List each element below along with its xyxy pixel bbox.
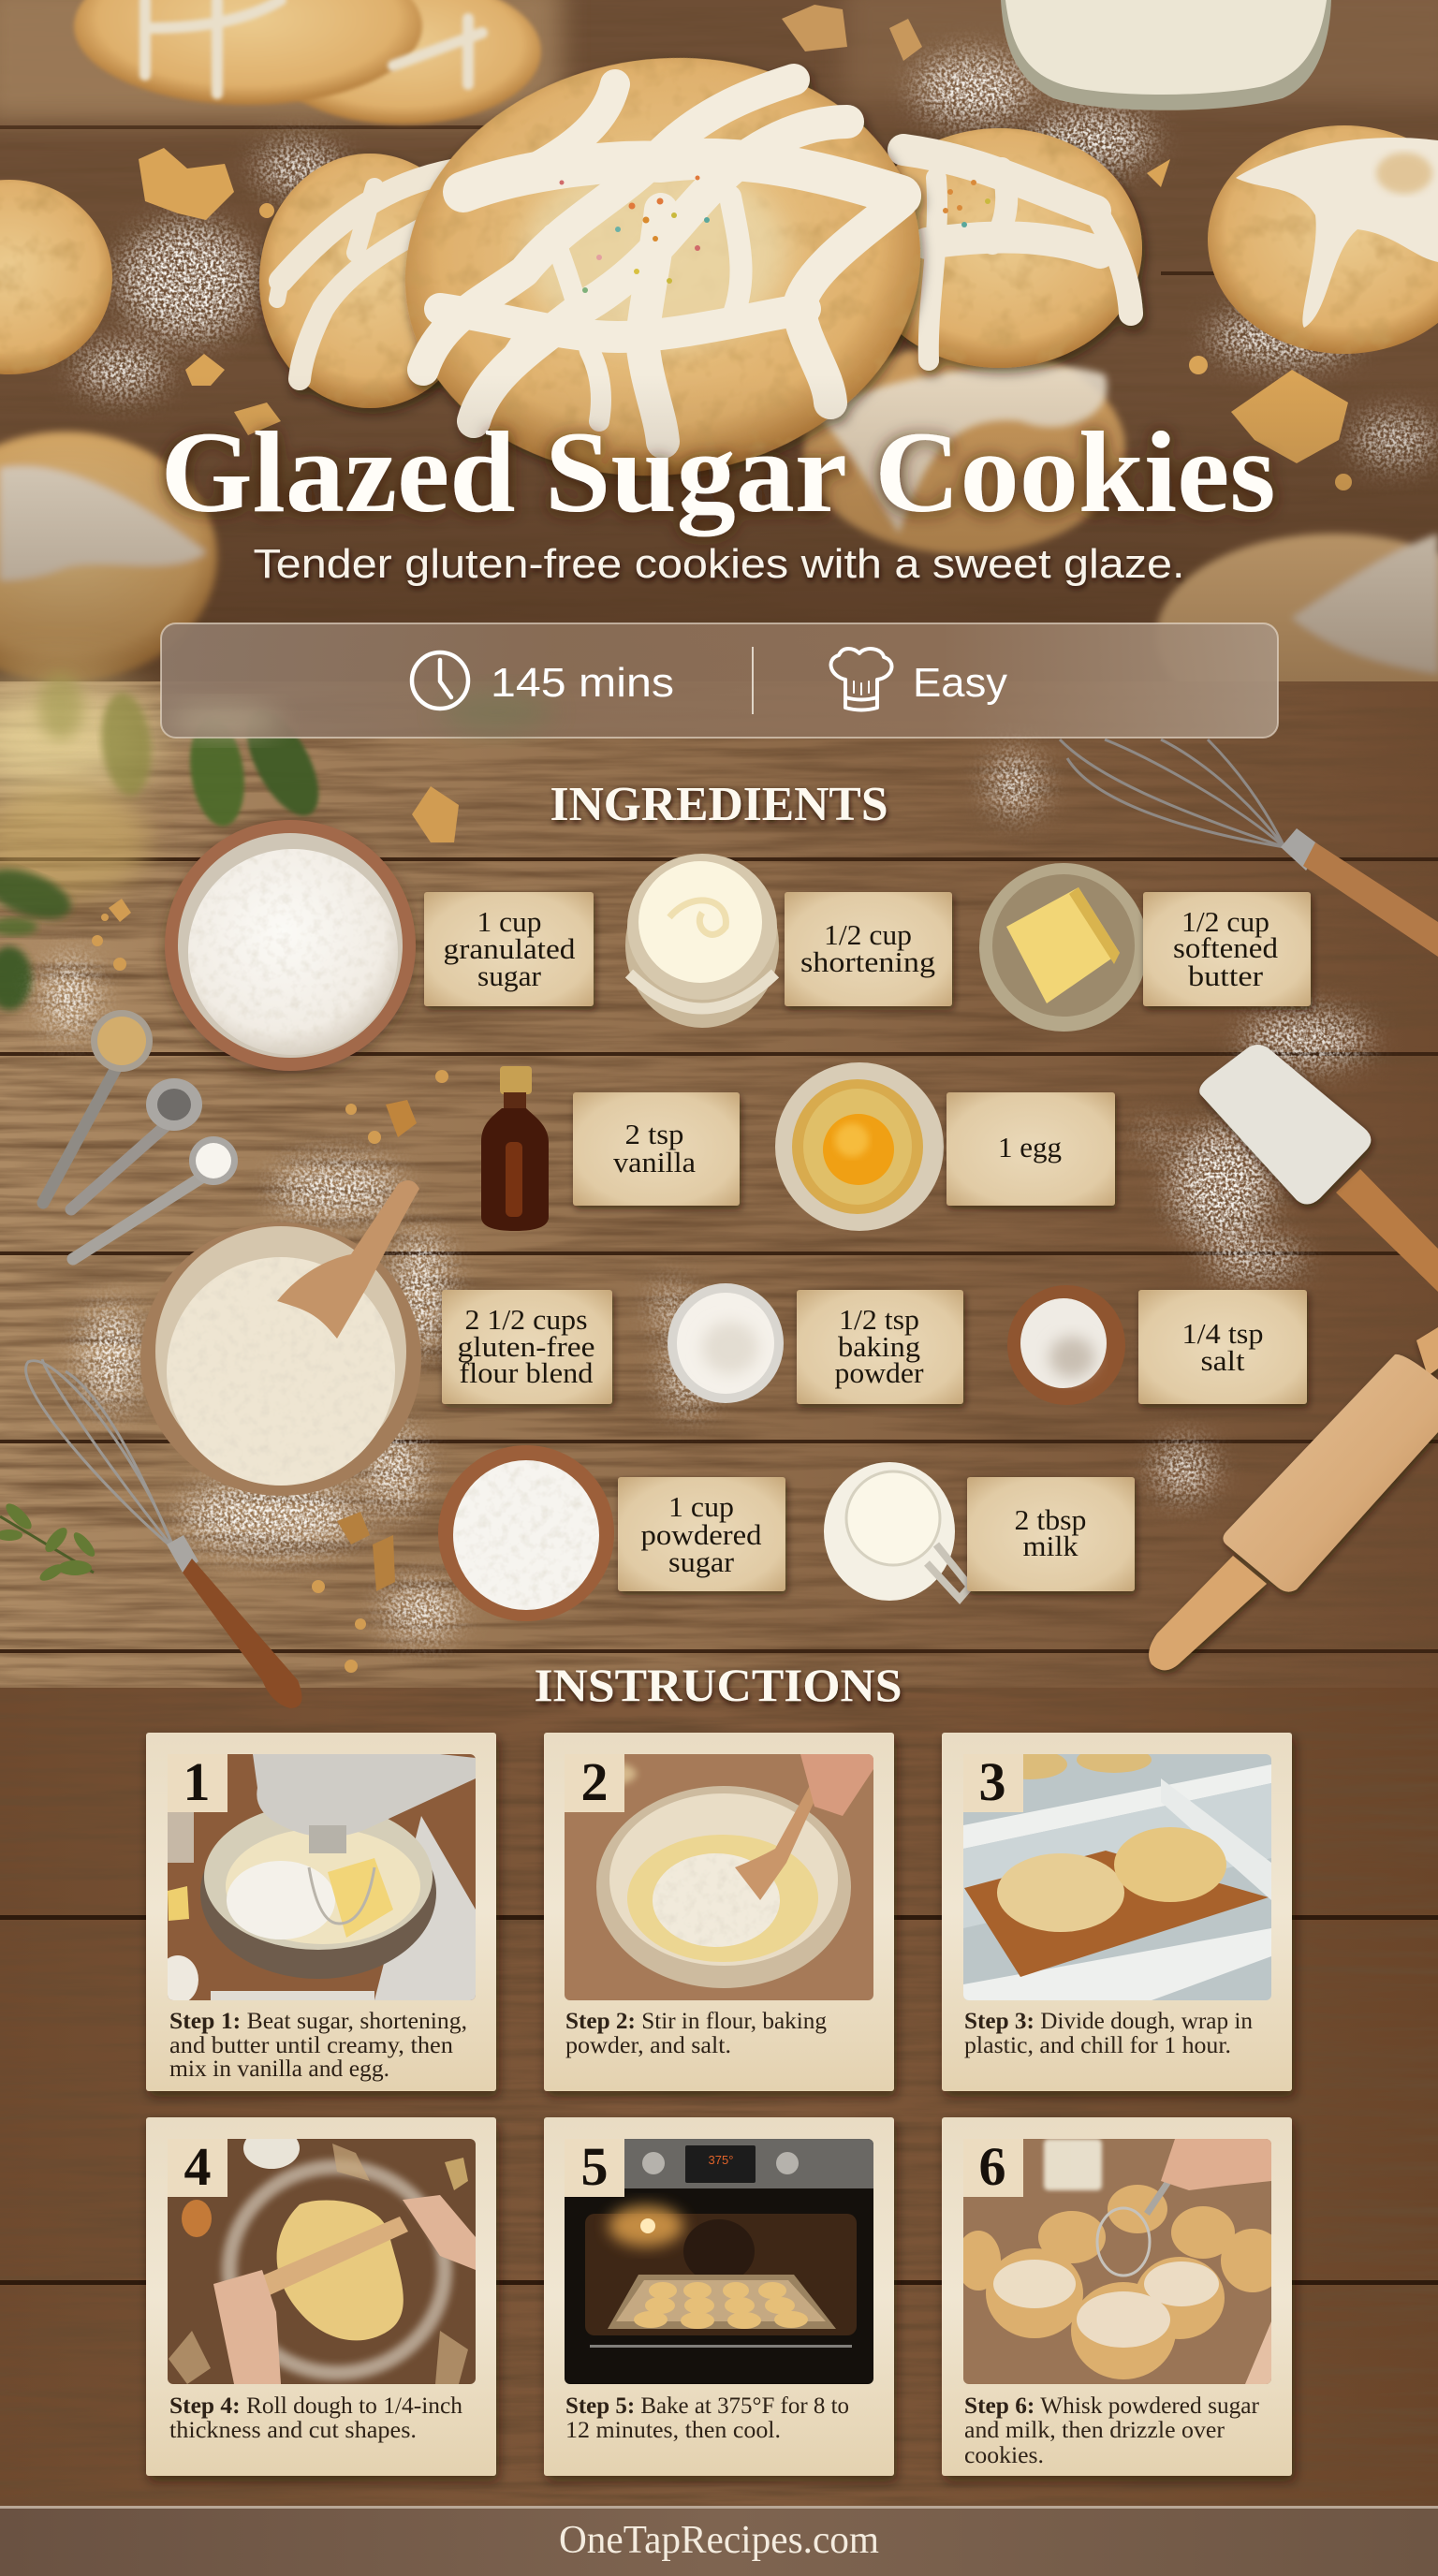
card: baking powder: baking <box>838 1330 920 1363</box>
photo: dough in fridge <box>963 1747 1271 2000</box>
ingredient: milk jug <box>824 1462 970 1601</box>
step badge: 6 <box>979 2136 1005 2197</box>
ingredient: egg bowl <box>775 1062 944 1231</box>
step card 1 <box>146 1733 496 2091</box>
hero lower fade <box>0 374 1438 683</box>
ingredient: powdered sugar bowl <box>438 1445 614 1621</box>
step text: powder, and salt. <box>565 2033 731 2058</box>
step badge: 2 <box>580 1751 609 1812</box>
icon: herb sprig <box>0 1500 98 1584</box>
card: baking powder: powder <box>835 1356 924 1389</box>
card: milk <box>967 1477 1135 1591</box>
crumbs <box>139 5 1352 490</box>
card: milk: milk <box>1022 1530 1078 1562</box>
icon: spatula <box>1199 1045 1438 1292</box>
card: powdered sugar: sugar <box>668 1545 735 1578</box>
card: baking powder <box>797 1290 963 1404</box>
ingredient cards <box>424 892 1311 1591</box>
wood background: ingredients section <box>0 681 1438 1688</box>
card: flour blend: flour blend <box>459 1356 594 1389</box>
card: softened butter: 1/2 cup <box>1181 905 1269 938</box>
card: shortening: 1/2 cup <box>824 918 912 951</box>
card: granulated sugar <box>424 892 594 1006</box>
card: softened butter <box>1143 892 1311 1006</box>
step text <box>169 2009 467 2082</box>
step text: and butter until creamy, then <box>169 2033 454 2058</box>
card: shortening: shortening <box>800 945 935 978</box>
step text: 12 minutes, then cool. <box>565 2418 781 2443</box>
photo: stand mixer <box>157 1754 476 2004</box>
icon: clock <box>412 652 468 709</box>
card: vanilla: 2 tsp <box>625 1118 683 1150</box>
heading: ingredients: INGREDIENTS <box>550 778 888 831</box>
step badge <box>963 2136 1023 2197</box>
photo: mixing bowl <box>562 1754 873 2000</box>
card: softened butter: butter <box>1188 959 1264 992</box>
card: flour blend: 2 1/2 cups <box>464 1303 588 1336</box>
card: powdered sugar: powdered <box>640 1518 762 1551</box>
step badge: 4 <box>183 2136 212 2197</box>
glass of milk <box>1001 0 1331 110</box>
step badge <box>963 1751 1023 1812</box>
footer bar <box>0 2506 1438 2576</box>
card: vanilla <box>573 1092 740 1206</box>
step badge: 1 <box>183 1751 210 1812</box>
step badge <box>565 2136 624 2197</box>
step badge <box>168 1751 227 1812</box>
card: flour blend <box>442 1290 612 1404</box>
cookie: top left pair <box>74 0 541 124</box>
hero photo: glazed cookies <box>0 0 1438 739</box>
step text: cookies. <box>964 2443 1044 2468</box>
cookie: main glazed <box>401 58 932 485</box>
ingredient: granulated sugar bowl <box>165 820 416 1074</box>
photo: glazing cookies <box>956 2139 1284 2384</box>
step card 6 <box>942 2117 1292 2476</box>
icon: rolling pin <box>1149 1327 1438 1670</box>
info bar <box>161 623 1278 738</box>
step text: Step 1: Beat sugar, shortening, <box>169 2009 467 2034</box>
heading: instructions: INSTRUCTIONS <box>534 1659 902 1711</box>
card: egg: 1 egg <box>998 1131 1062 1164</box>
card: granulated sugar: granulated <box>444 932 576 965</box>
card: salt <box>1138 1290 1307 1404</box>
title: Glazed Sugar Cookies <box>161 408 1275 537</box>
step text <box>565 2009 827 2058</box>
step badge: 3 <box>979 1751 1005 1812</box>
card: flour blend: gluten-free <box>457 1330 595 1363</box>
step text: plastic, and chill for 1 hour. <box>964 2033 1231 2058</box>
step text: Step 3: Divide dough, wrap in <box>964 2009 1253 2034</box>
ingredient: flour bowl with scoop <box>140 1180 421 1496</box>
card: shortening <box>785 892 952 1006</box>
step card 5 <box>544 2117 894 2476</box>
card: powdered sugar: 1 cup <box>668 1490 734 1523</box>
ingredient: vanilla bottle <box>481 1066 549 1231</box>
icon: whisk top right <box>1060 739 1438 957</box>
icon: measuring spoons <box>43 1010 238 1259</box>
card: granulated sugar: sugar <box>477 959 542 992</box>
ingredient: shortening jar <box>625 854 779 1028</box>
cookie: behind below right <box>803 344 1125 554</box>
photo: oven <box>565 2139 873 2384</box>
step text: Step 5: Bake at 375°F for 8 to <box>565 2393 849 2419</box>
step text <box>565 2393 849 2443</box>
card: granulated sugar: 1 cup <box>477 905 541 938</box>
card: vanilla: vanilla <box>613 1146 696 1178</box>
ingredient: salt bowl <box>1007 1285 1125 1405</box>
step badge: 5 <box>580 2136 609 2197</box>
step text: Step 2: Stir in flour, baking <box>565 2009 827 2034</box>
difficulty: Easy <box>913 660 1007 706</box>
scattered crumbs and flour <box>46 756 1367 1673</box>
ingredient: butter bowl <box>979 863 1148 1032</box>
cookie: top right glazed <box>1208 125 1438 354</box>
cookie: far left <box>0 180 112 374</box>
footer bar: OneTapRecipes.com <box>559 2519 879 2562</box>
card: softened butter: softened <box>1173 931 1279 964</box>
step card 4 <box>146 2117 496 2476</box>
cookie: bottom left blurred <box>0 432 217 682</box>
subtitle: Tender gluten-free cookies with a sweet glaze. <box>253 541 1185 587</box>
step badge <box>168 2136 227 2197</box>
oven display: 375° <box>709 2153 733 2167</box>
step card 3 <box>942 1733 1292 2091</box>
step text <box>964 2009 1253 2058</box>
icon: chef hat <box>831 649 891 710</box>
cookie: behind right <box>858 128 1142 368</box>
cookie: behind left <box>259 154 480 408</box>
photo: rolling dough <box>168 2128 476 2384</box>
blurred leaves and sunlight <box>0 673 333 1010</box>
icon: whisk bottom left <box>26 1359 302 1708</box>
step text: Step 4: Roll dough to 1/4-inch <box>169 2393 463 2419</box>
card: salt: salt <box>1200 1344 1245 1377</box>
flour dust <box>80 56 1434 462</box>
cookie: bottom right blurred <box>1156 534 1438 739</box>
step text <box>964 2393 1260 2468</box>
card: powdered sugar <box>618 1477 785 1591</box>
step text <box>169 2393 463 2443</box>
wood background: instructions section <box>0 1688 1438 2506</box>
prep time: 145 mins <box>491 660 674 706</box>
card: salt: 1/4 tsp <box>1181 1317 1264 1350</box>
card: baking powder: 1/2 tsp <box>839 1303 919 1336</box>
ingredient: baking powder dish <box>668 1283 784 1403</box>
step badge <box>565 1751 624 1812</box>
card: milk: 2 tbsp <box>1015 1503 1086 1536</box>
step text: and milk, then drizzle over <box>964 2418 1225 2443</box>
card: egg <box>946 1092 1115 1206</box>
step card 2 <box>544 1733 894 2091</box>
step text: thickness and cut shapes. <box>169 2418 417 2443</box>
step text: mix in vanilla and egg. <box>169 2056 389 2082</box>
step text: Step 6: Whisk powdered sugar <box>964 2393 1260 2419</box>
